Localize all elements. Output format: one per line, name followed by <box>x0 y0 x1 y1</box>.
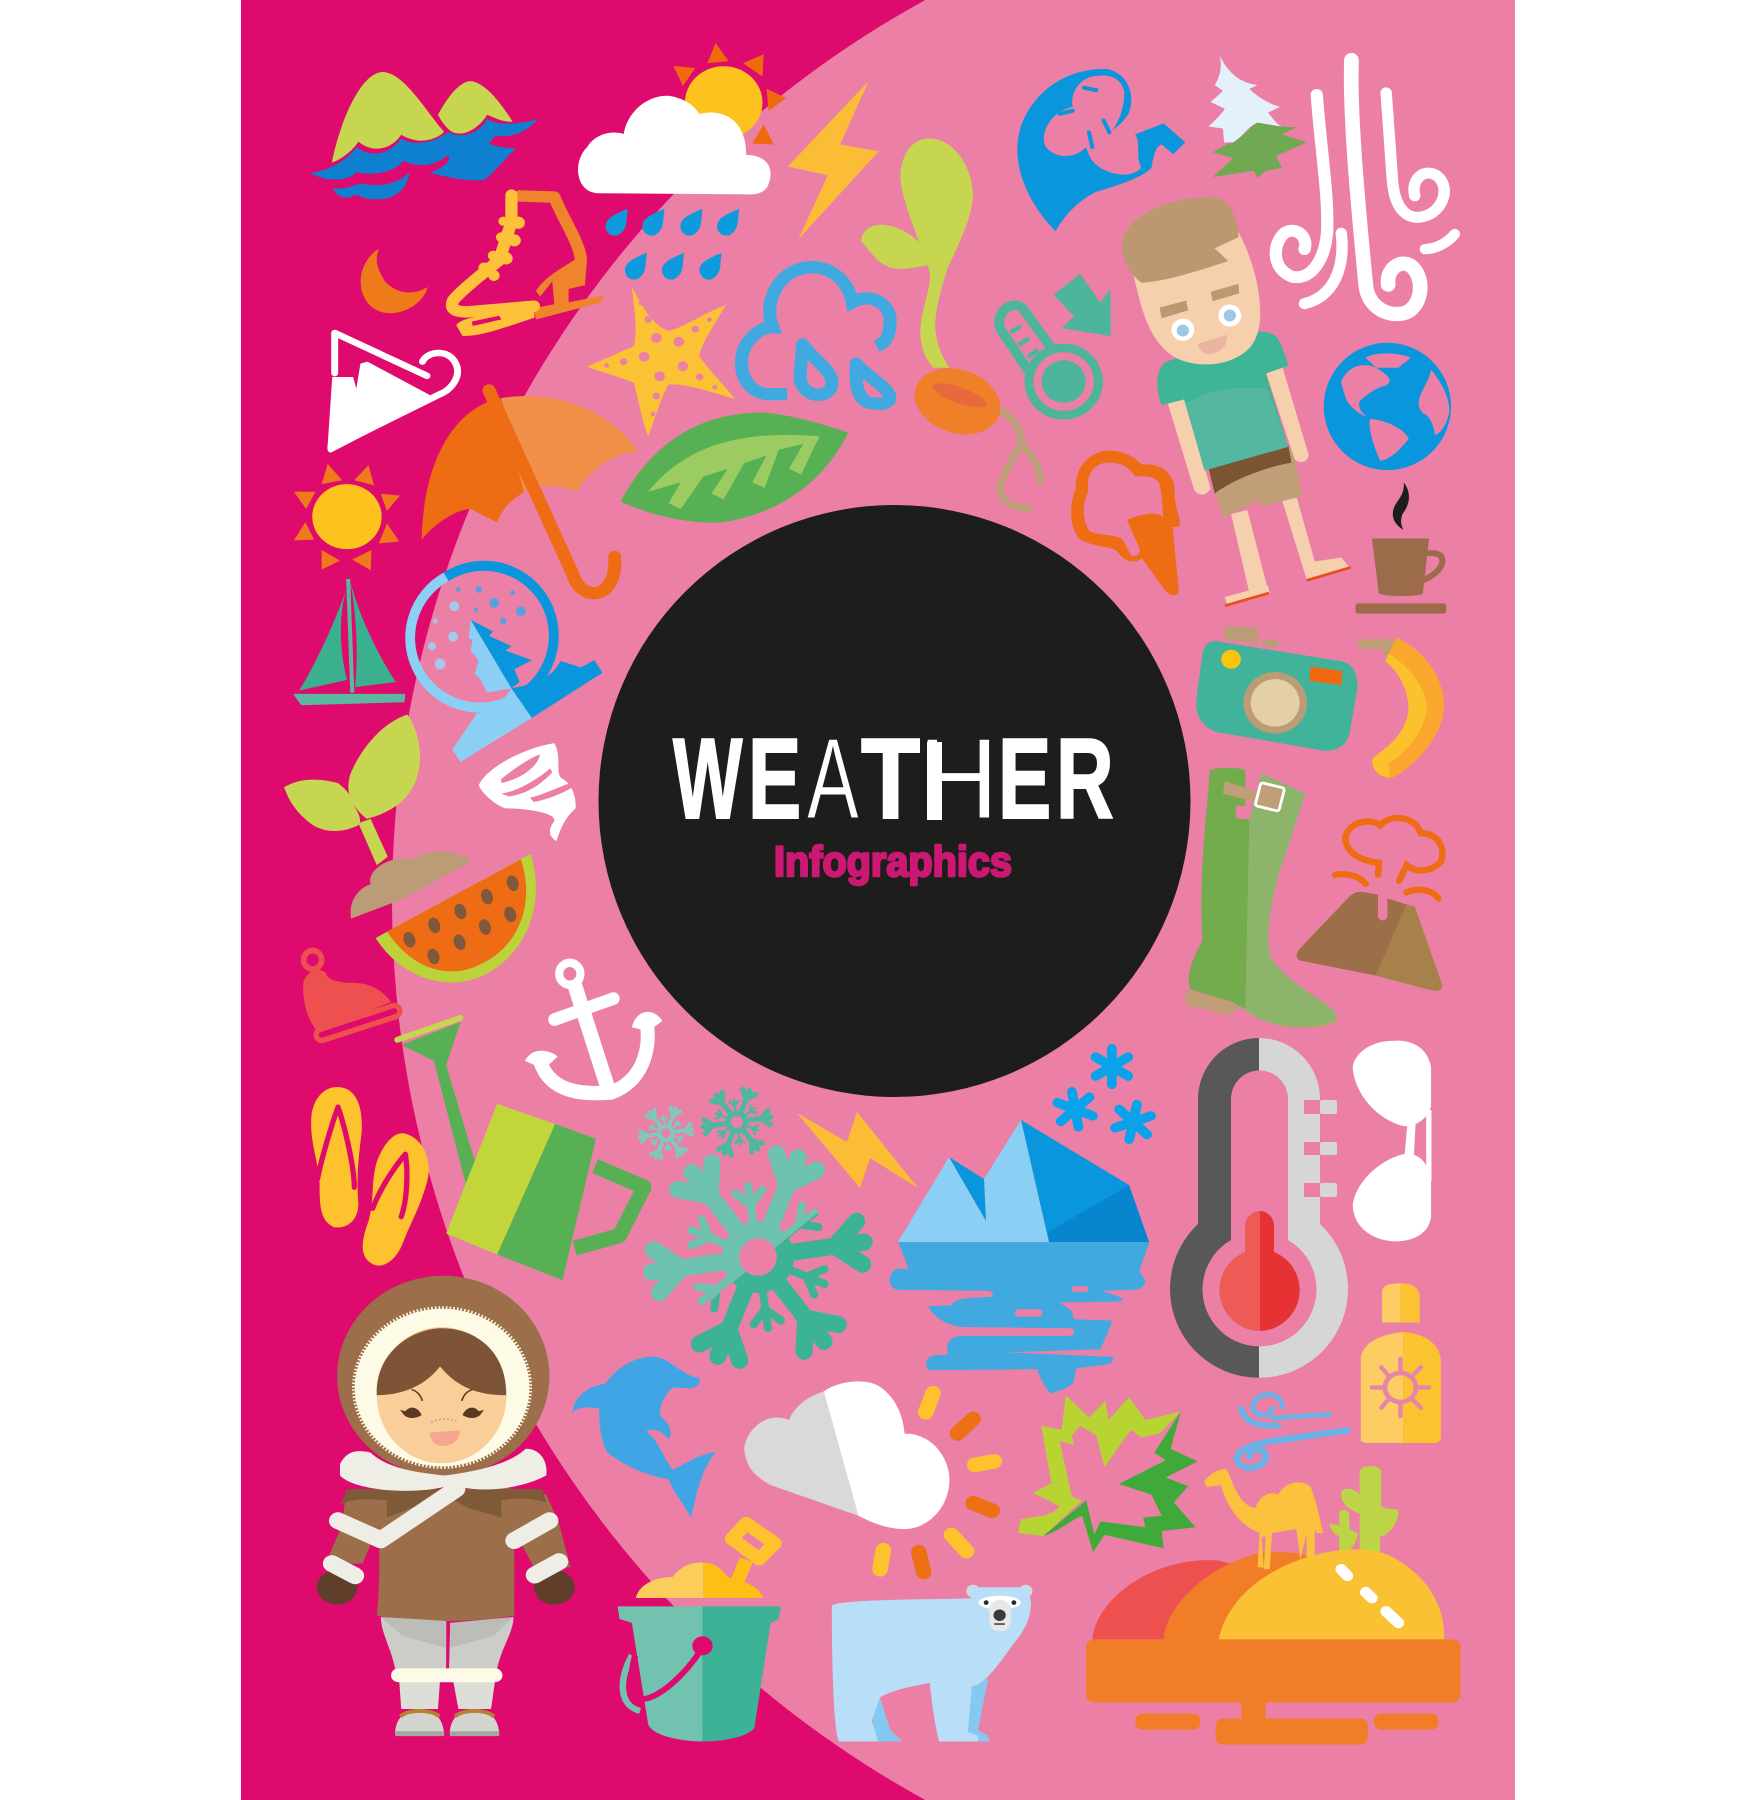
icon: tornado <box>479 743 576 841</box>
icon: sand bucket and spade <box>618 1523 781 1742</box>
icon: raindrops <box>606 209 739 280</box>
icon: snow globe <box>410 566 602 762</box>
icon: girl in parka <box>317 1276 575 1736</box>
icon: small light snowflake <box>638 1105 694 1161</box>
title <box>672 716 1114 843</box>
icon: umbrella <box>422 390 638 593</box>
icon: polar bear <box>832 1586 1031 1742</box>
icon: lightning bolt <box>788 81 879 239</box>
icon: camera <box>1196 626 1358 751</box>
icon: sunscreen bottle <box>1361 1283 1441 1443</box>
icon: banana <box>1358 638 1444 778</box>
title: R <box>1056 716 1114 843</box>
icon: desert landscape with camel and cactus <box>1086 1466 1460 1745</box>
icon: iceberg <box>890 1120 1149 1393</box>
icon: small teal snowflake <box>701 1086 773 1158</box>
background: pink circle <box>392 0 1515 1800</box>
icon: globe <box>1324 343 1451 470</box>
icon: blue asterisk snowflakes <box>1056 1049 1153 1143</box>
icon: starfish <box>587 287 735 436</box>
icon: sunglasses <box>1353 1041 1431 1241</box>
icon: anchor <box>525 963 662 1097</box>
icon: watermelon slice <box>376 854 536 982</box>
icon: large snowflake <box>645 1143 871 1371</box>
icon: maple leaf outline <box>1018 1395 1198 1552</box>
icon: small lightning bolt <box>797 1112 918 1188</box>
title: W <box>673 716 742 843</box>
icon: melting ice cream <box>1071 451 1180 595</box>
icon: large thermometer <box>1170 1038 1348 1378</box>
background: magenta panel <box>241 0 1515 1800</box>
cover illustration <box>241 0 1515 1800</box>
icon: ice skate <box>452 195 603 336</box>
icon: mountain outline <box>327 333 458 453</box>
title: E <box>748 716 801 843</box>
icon: crescent moon <box>361 249 428 313</box>
icon: sun <box>294 464 400 570</box>
title: H <box>918 716 999 843</box>
icon: rain cloud outline <box>741 267 890 404</box>
icon: winter hat <box>303 951 394 1035</box>
title: T <box>861 716 920 843</box>
icon: sun behind cloud <box>578 43 786 194</box>
central black circle <box>598 505 1190 1097</box>
icon: flip-flops <box>311 1087 429 1266</box>
subtitle: Infographics <box>774 838 1012 886</box>
icon: sprouting plant <box>284 714 472 919</box>
icon: snowy pine tree <box>1209 55 1307 178</box>
icon: coffee cup <box>1356 482 1446 614</box>
icon: small wind <box>1237 1394 1347 1468</box>
icon: watering can <box>397 1018 644 1280</box>
icon: ocean wave <box>1017 69 1185 231</box>
title: E <box>998 716 1051 843</box>
book cover <box>241 0 1515 1800</box>
icon: seedling with seed <box>861 138 1040 508</box>
icon: sailboat <box>293 579 405 705</box>
title: A <box>807 716 859 843</box>
icon: cloud with sun rays <box>744 1381 994 1572</box>
icon: mountains and waves <box>310 72 538 199</box>
icon: wellington boot <box>1185 768 1336 1028</box>
icon: green leaf <box>620 413 848 523</box>
icon: boy in summer clothes <box>1122 197 1351 606</box>
icon: dolphin <box>573 1357 716 1518</box>
icon: wind swirls <box>1276 60 1455 314</box>
icon: thermometer with down arrow <box>999 274 1111 415</box>
icon: volcano <box>1297 818 1442 991</box>
